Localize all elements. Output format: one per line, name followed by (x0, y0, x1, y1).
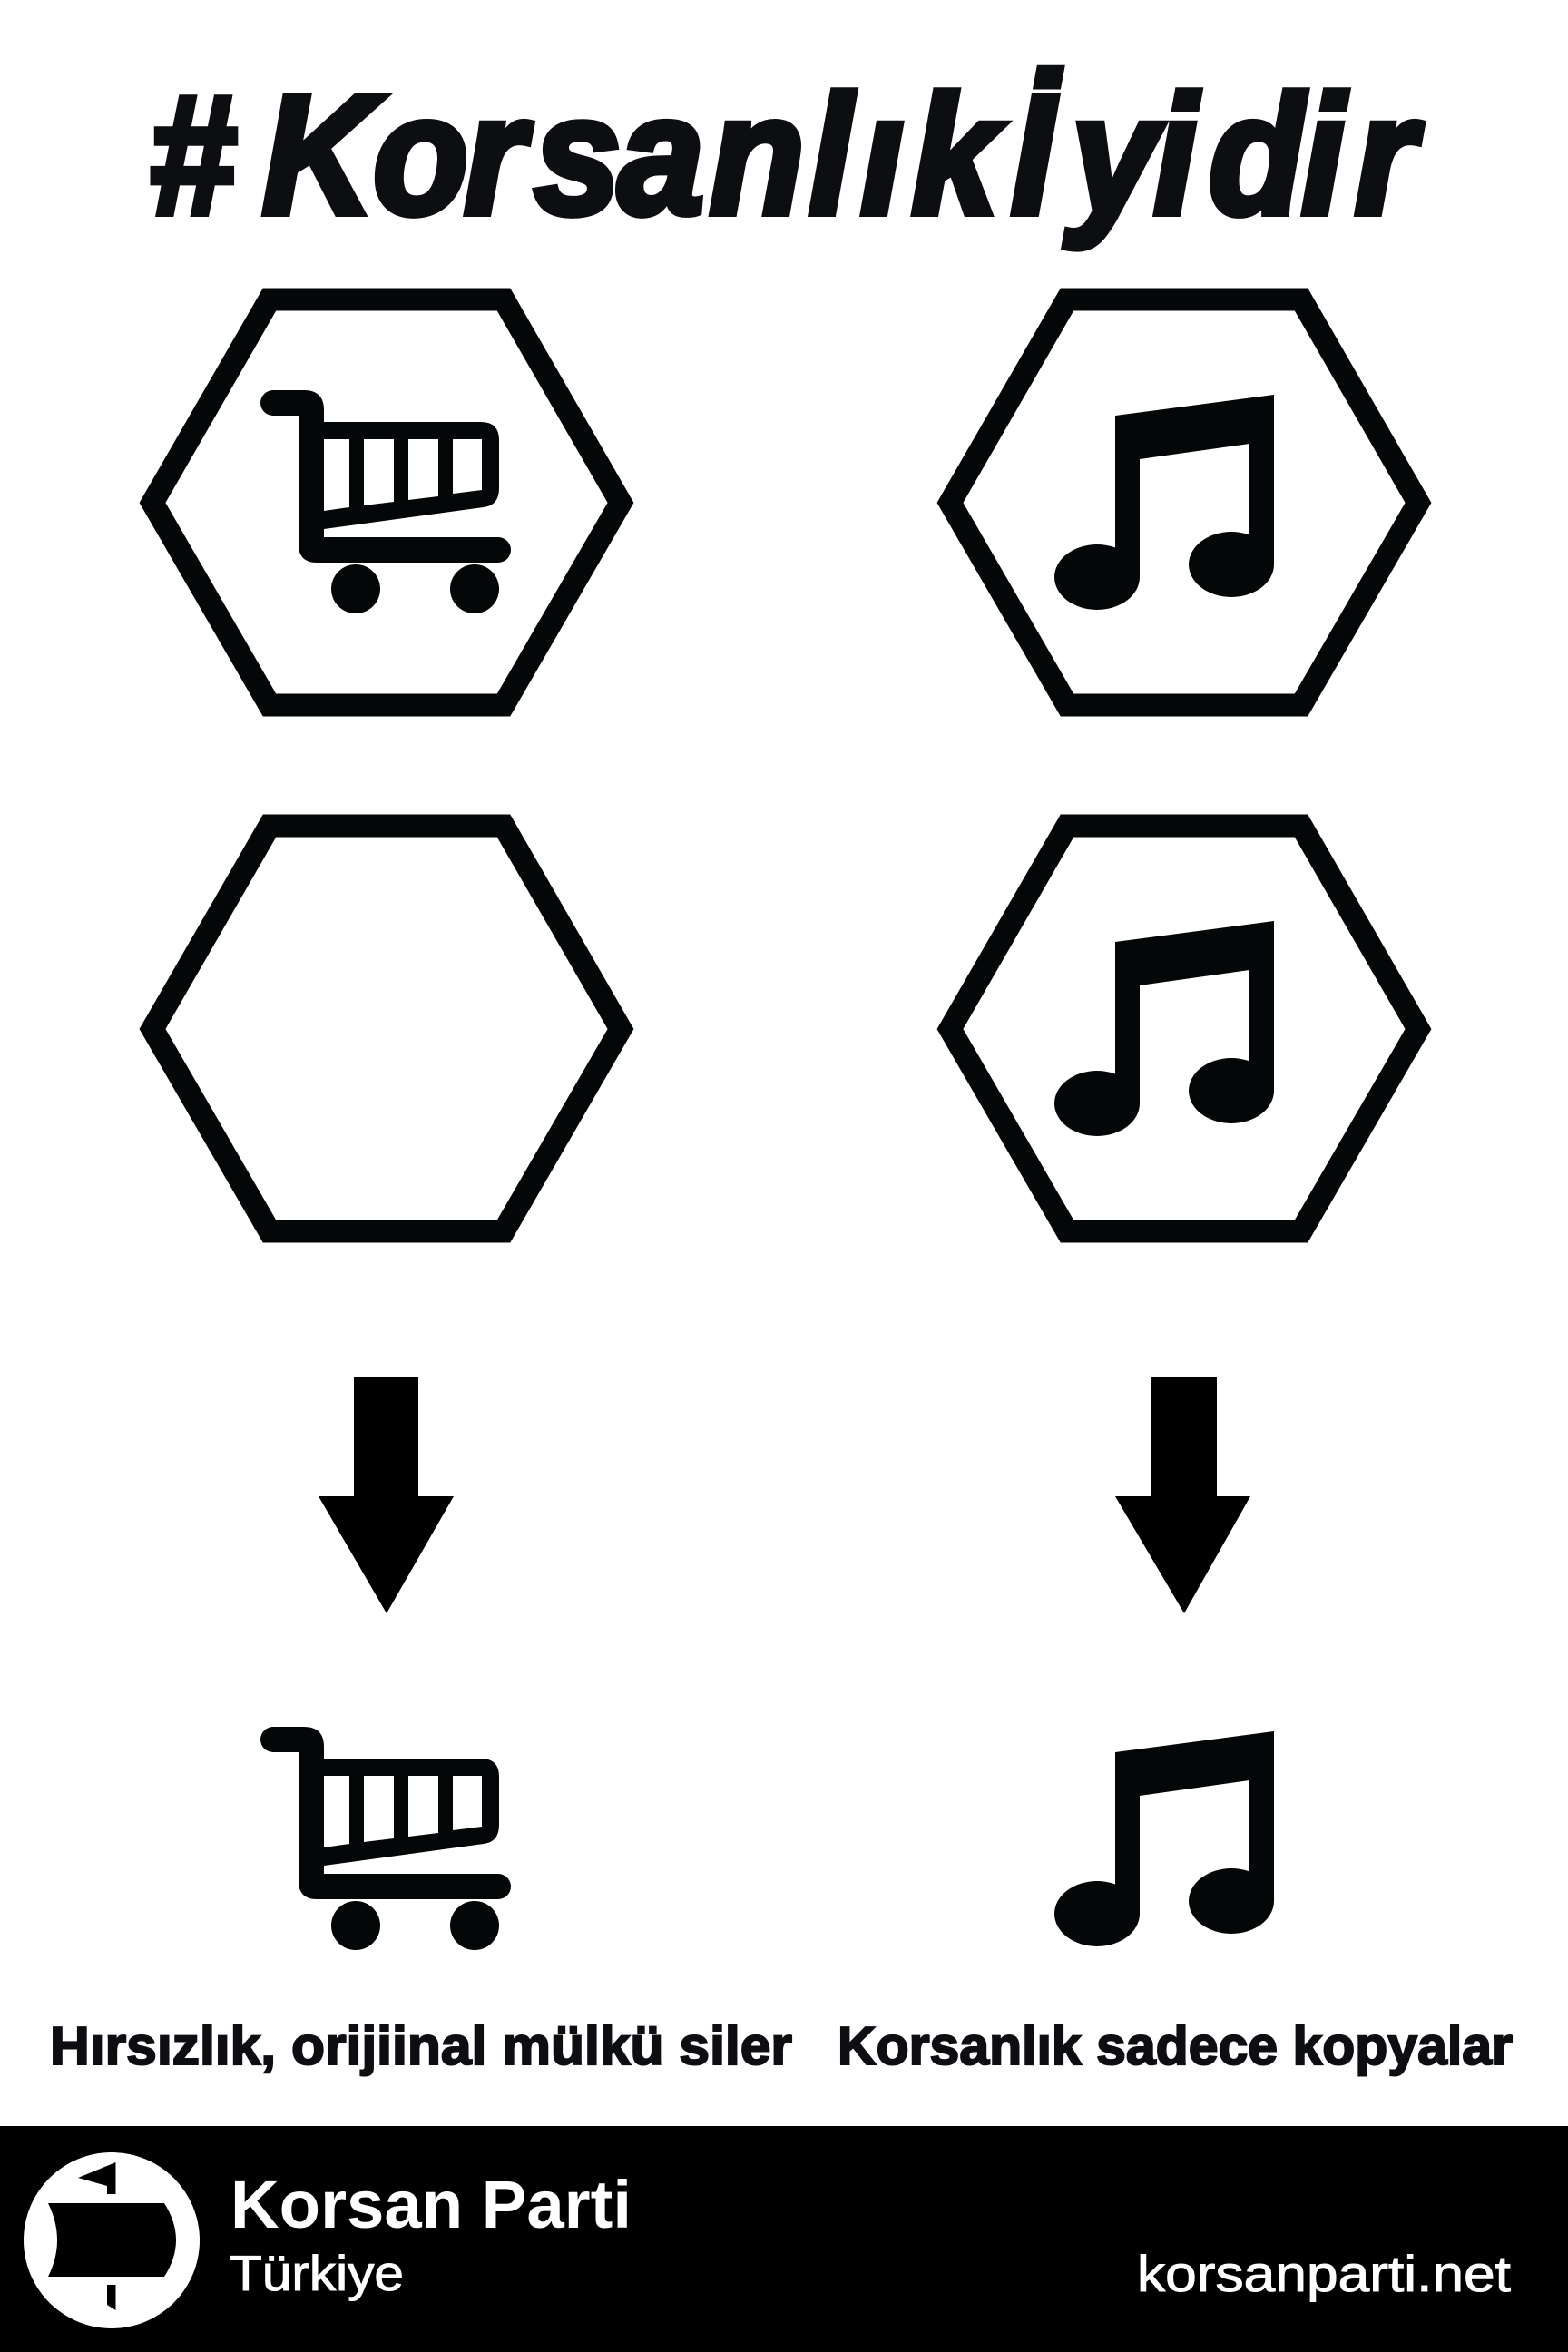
hexagon: top left (152, 299, 621, 705)
panel: music before copy (950, 299, 1418, 705)
logo: pirate party ship (24, 2152, 200, 2328)
arrow: right (1115, 1377, 1250, 1613)
panel: store before theft (152, 299, 621, 705)
arrow: left (318, 1377, 454, 1613)
country: Türkiye (230, 2245, 404, 2301)
icon: music notes result (1054, 1731, 1274, 1946)
party name: Korsan Parti (230, 2167, 632, 2242)
caption: theft: Hırsızlık, orijiinal mülkü siler (50, 2016, 792, 2076)
footer band (0, 2126, 1568, 2352)
icon: shopping cart result (260, 1727, 511, 1950)
icon: music notes in hexagon (1054, 395, 1274, 610)
icon: music notes copy in hexagon (1054, 921, 1274, 1136)
panel: store after theft (152, 826, 621, 1231)
title: #Korsanlıkİyidir (149, 60, 1423, 250)
icon: shopping cart in hexagon (260, 390, 511, 613)
caption: piracy: Korsanlık sadece kopyalar (838, 2016, 1513, 2076)
hexagon: top right (950, 299, 1418, 705)
panel: music after copy (950, 826, 1418, 1231)
hexagon: second right (950, 826, 1418, 1231)
website: korsanparti.net (1137, 2245, 1511, 2302)
hexagon: empty (152, 826, 621, 1231)
